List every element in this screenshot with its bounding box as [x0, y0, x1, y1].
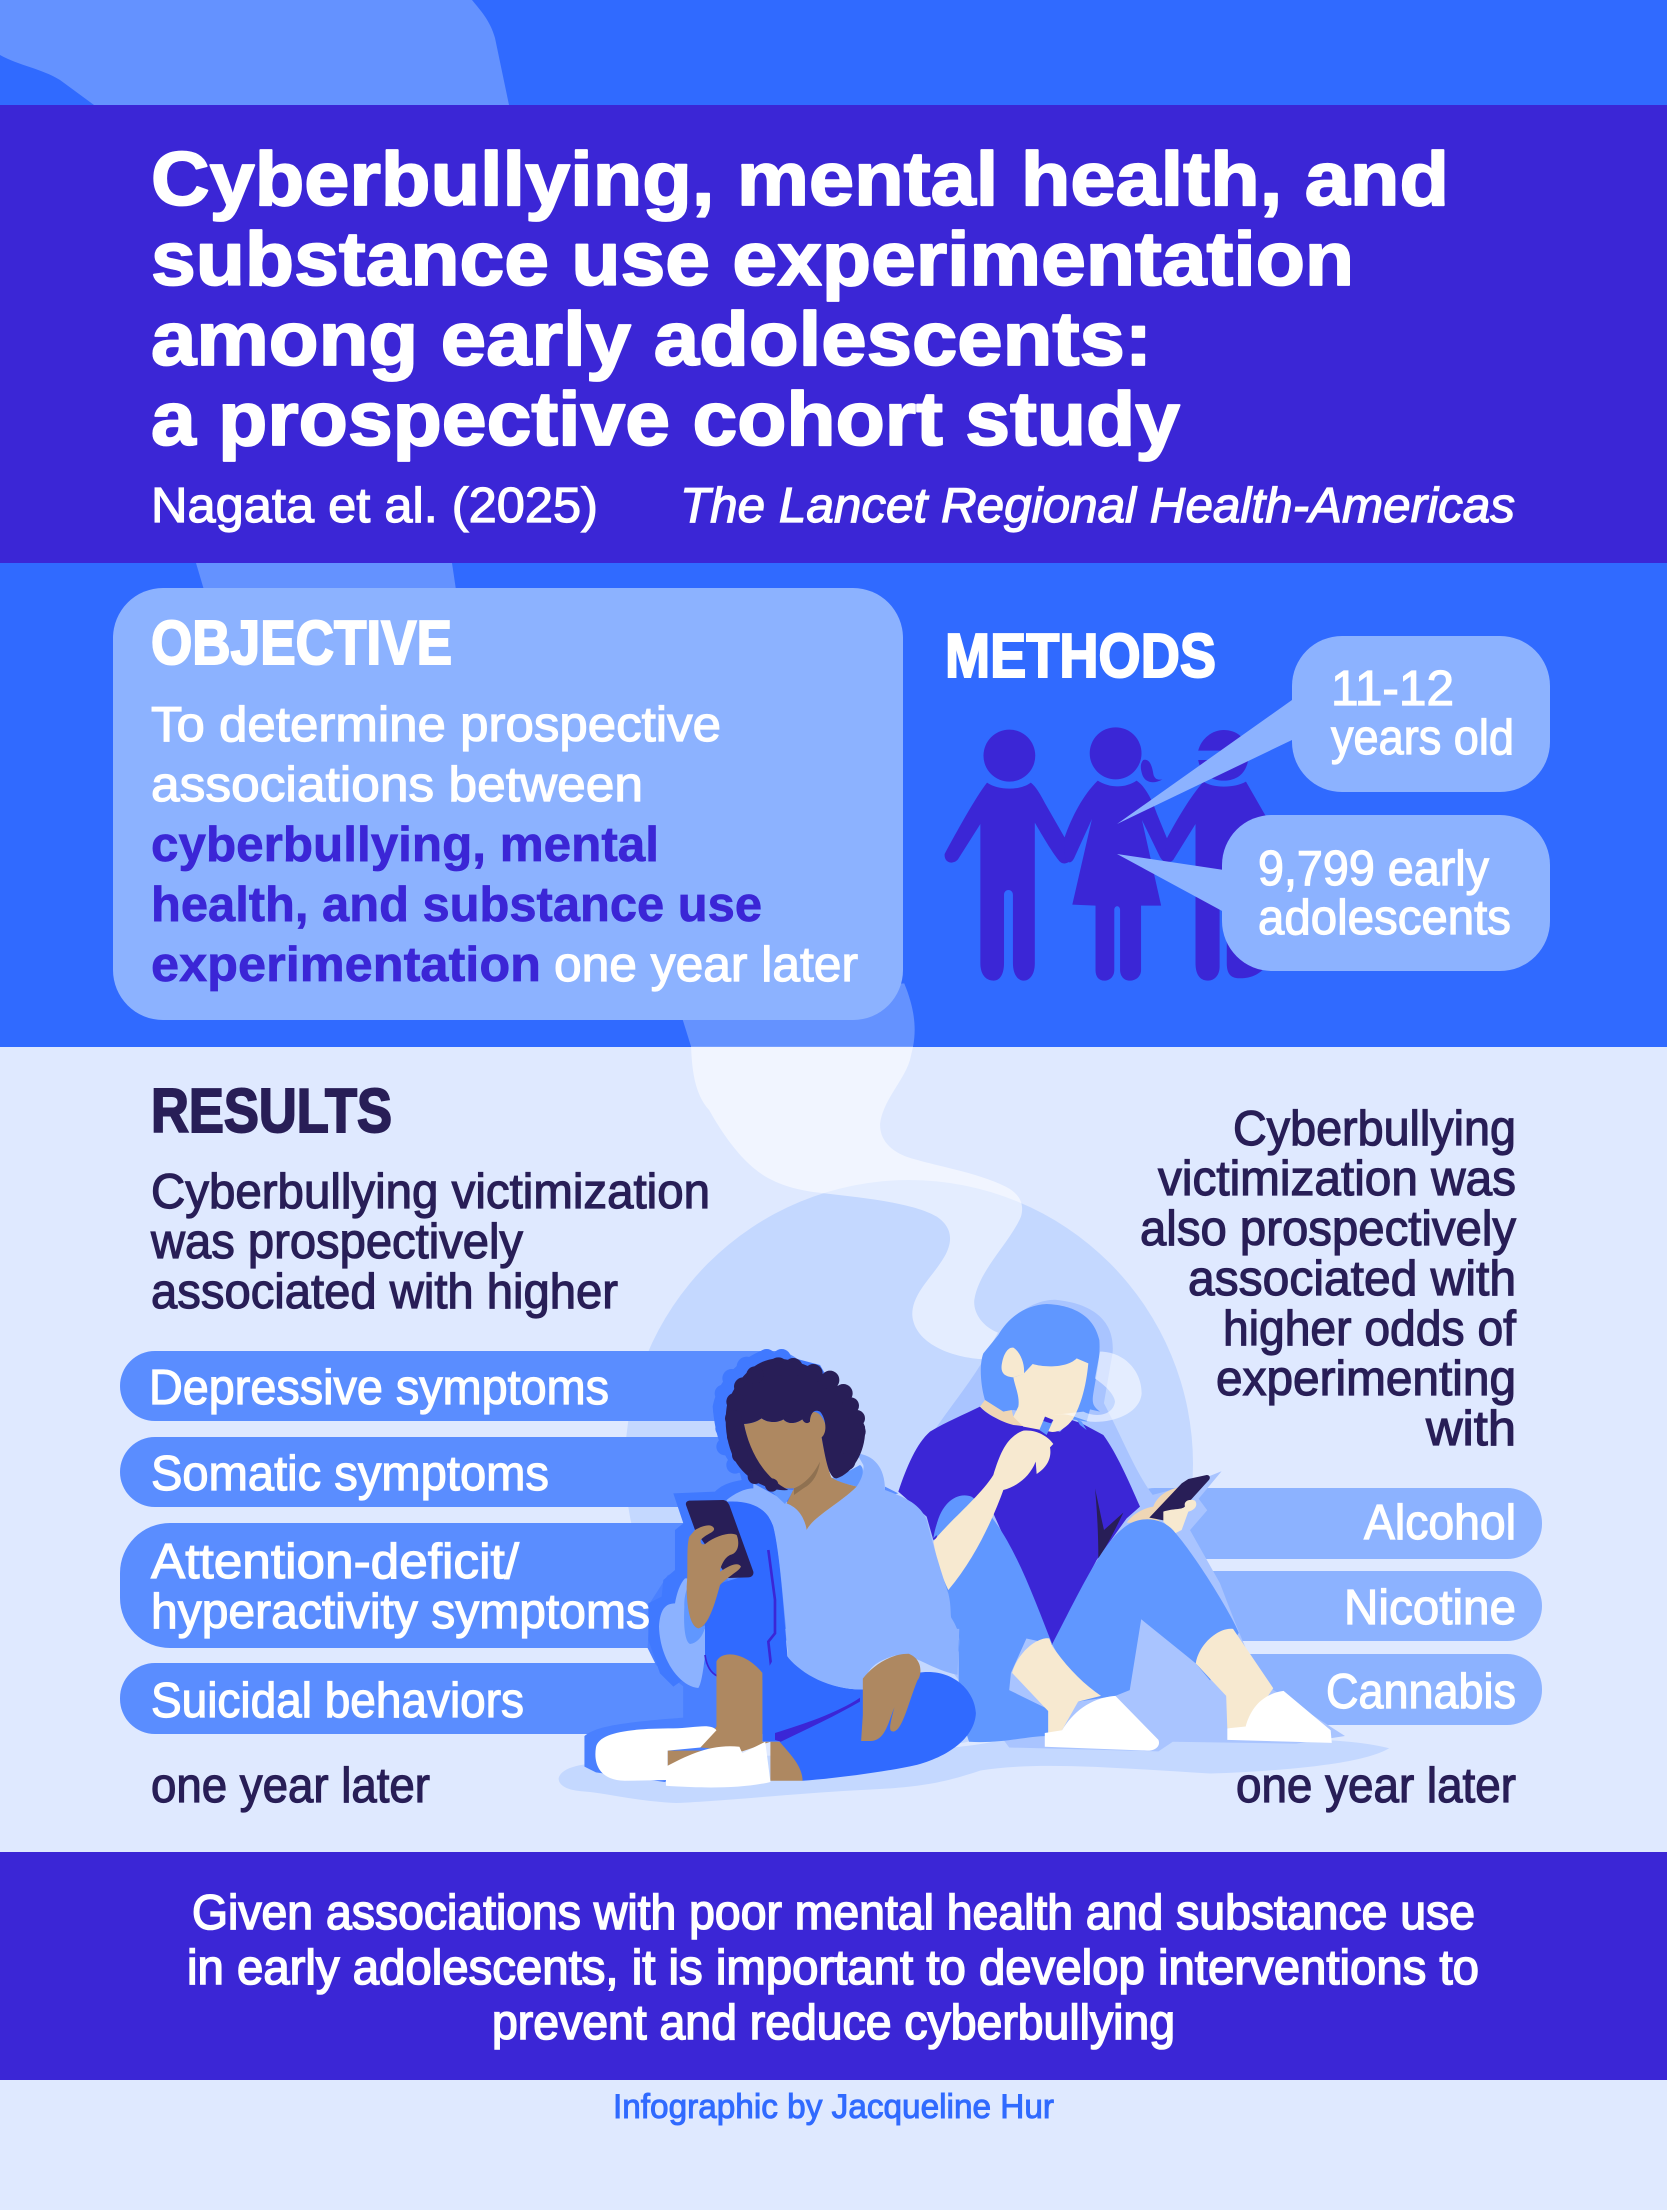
title: substance use experimentation: [151, 217, 1354, 302]
callout: age: 11-12: [1331, 662, 1454, 716]
results intro right: with: [1425, 1402, 1516, 1456]
left outcome labels: Somatic symptoms: [151, 1447, 549, 1501]
vaping teen offset shadow: [906, 1300, 1345, 1751]
results intro right: Cyberbullying: [1233, 1102, 1516, 1156]
callout: age: years old: [1331, 711, 1514, 765]
shin, resting hand, shoes: [595, 1654, 920, 1787]
objective text: health, and substance use: [151, 878, 762, 932]
right substance labels: Alcohol: [1364, 1496, 1516, 1550]
head and hoodie: [686, 1357, 959, 1647]
citation authors: Nagata et al. (2025): [151, 479, 598, 533]
callout: sample size: 9,799 early: [1258, 842, 1489, 896]
header band: [0, 105, 1667, 563]
head and raised arm: [933, 1304, 1142, 1590]
results intro left: was prospectively: [150, 1215, 523, 1269]
background circle: [625, 1180, 1193, 1748]
title: [151, 137, 1449, 462]
left outcome labels: hyperactivity symptoms: [151, 1585, 650, 1639]
results intro right: experimenting: [1216, 1352, 1516, 1406]
phone teen: [595, 1357, 976, 1787]
left outcome labels: Suicidal behaviors: [151, 1674, 524, 1728]
conclusion band: [0, 1852, 1667, 2080]
results intro right: also prospectively: [1140, 1202, 1516, 1256]
results heading: RESULTS: [151, 1077, 392, 1146]
icon: three children holding hands: [945, 727, 1266, 981]
results intro right: associated with: [1188, 1252, 1516, 1306]
floor shadow: [559, 1737, 1389, 1803]
results intro left: associated with higher: [151, 1265, 618, 1319]
trousers and hoodie hem: [762, 1629, 976, 1781]
methods heading: METHODS: [945, 622, 1216, 691]
conclusion band: Given associations with poor mental health and substance use: [192, 1886, 1475, 1940]
phone teen offset shadow: [584, 1349, 853, 1782]
right substance labels: Cannabis: [1326, 1665, 1516, 1719]
vaping teen: [898, 1304, 1332, 1751]
illustration: two teens on phones: [559, 1300, 1389, 1803]
callout: sample size: [1117, 815, 1550, 971]
objective heading: OBJECTIVE: [151, 609, 452, 678]
left outcome labels: Depressive symptoms: [149, 1361, 609, 1415]
left outcome labels: [149, 1361, 650, 1728]
conclusion band: in early adolescents, it is important to develop interventions to: [187, 1941, 1479, 1995]
results intro right: [1140, 1102, 1516, 1456]
objective text: experimentation: [151, 938, 541, 992]
vape smoke: [691, 1047, 1022, 1359]
objective text: one year later: [554, 938, 858, 992]
title: among early adolescents:: [151, 297, 1152, 382]
objective text: To determine prospective: [151, 698, 721, 752]
right substance labels: Nicotine: [1344, 1581, 1516, 1635]
conclusion band: prevent and reduce cyberbullying: [492, 1996, 1175, 2050]
left outcome labels: Attention-deficit/: [151, 1535, 519, 1589]
results intro left: [150, 1165, 710, 1319]
objective text: cyberbullying, mental: [151, 818, 659, 872]
left result pills: [120, 1351, 810, 1734]
right timing note: one year later: [1236, 1759, 1516, 1813]
results intro left: Cyberbullying victimization: [151, 1165, 710, 1219]
citation journal: The Lancet Regional Health-Americas: [680, 479, 1515, 533]
right result pills: [1120, 1488, 1542, 1725]
upper body layer: [659, 1501, 817, 1688]
shirt: [898, 1407, 1210, 1645]
left timing note: one year later: [151, 1759, 430, 1813]
credit: Infographic by Jacqueline Hur: [613, 2088, 1054, 2126]
objective text: [151, 698, 858, 992]
right substance labels: [1326, 1496, 1516, 1719]
title: a prospective cohort study: [151, 377, 1180, 462]
results intro right: victimization was: [1158, 1152, 1516, 1206]
panel: objective: [113, 588, 903, 1020]
callout: age: [1117, 636, 1550, 824]
callout: sample size: adolescents: [1258, 891, 1511, 945]
legs and shoes: [936, 1495, 1332, 1751]
results intro right: higher odds of: [1223, 1302, 1516, 1356]
objective text: associations between: [151, 758, 643, 812]
title: Cyberbullying, mental health, and: [151, 137, 1449, 222]
smoke band section: [677, 983, 915, 1047]
